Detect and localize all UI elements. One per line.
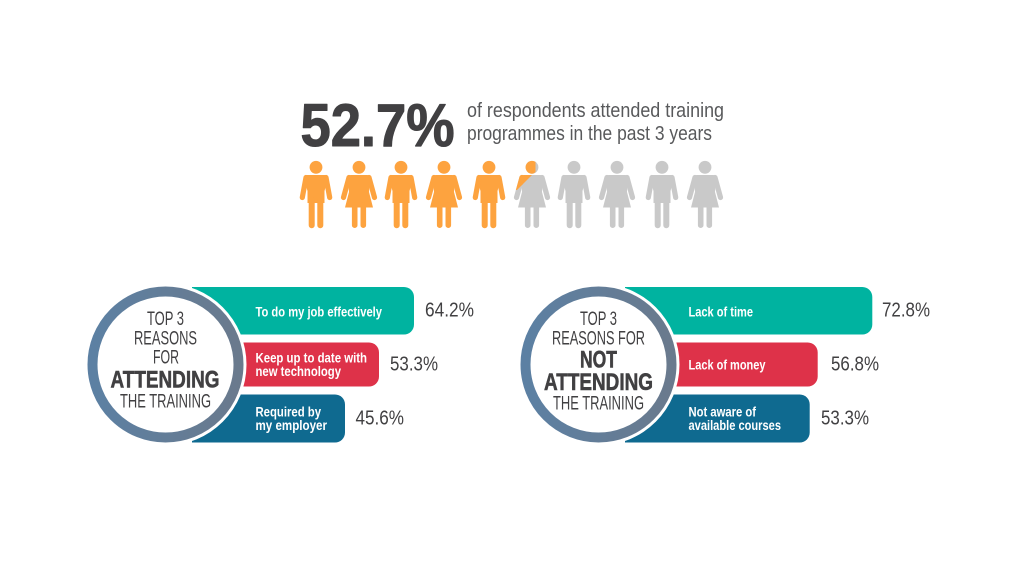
icon: person 5 filled [475, 161, 503, 225]
panel: reasons for not attending [518, 284, 930, 446]
bar: keep up to date [192, 342, 379, 386]
icon: person 2 filled [344, 161, 374, 225]
bar labels [256, 303, 382, 433]
badge: top 3 reasons for attending: THE TRAINING [120, 391, 211, 412]
bar: lack of money [625, 342, 818, 386]
bar: not aware of available courses [625, 394, 810, 442]
badge: top 3 reasons for not attending [518, 284, 680, 446]
bar labels: my employer [256, 417, 327, 433]
icon: person 3 filled [387, 161, 415, 225]
icon: person 1 filled [302, 161, 330, 225]
badge: top 3 reasons for attending: FOR [153, 347, 179, 368]
badge: top 3 reasons for not attending: THE TRAINING [553, 393, 644, 414]
bar labels: Keep up to date with [256, 350, 367, 366]
bar labels: Required by [256, 404, 321, 420]
bar labels: Lack of money [688, 356, 766, 372]
badge: top 3 reasons for attending [84, 284, 246, 446]
icon: person 10 empty [690, 161, 720, 225]
headline: 52.7%: 52.7% [300, 92, 454, 159]
bar labels: new technology [256, 363, 341, 379]
icon: person 9 empty [648, 161, 676, 225]
badge: top 3 reasons for not attending: REASONS FOR [552, 328, 645, 349]
icon: person 7 empty [560, 161, 588, 225]
values [821, 300, 930, 430]
values: 64.2% [425, 300, 474, 322]
values [356, 300, 474, 430]
badge: top 3 reasons for not attending: ATTENDING [544, 369, 653, 396]
panel: reasons for attending [84, 284, 474, 446]
bar: to do my job effectively [192, 287, 414, 334]
bar labels: To do my job effectively [256, 303, 382, 319]
values: 72.8% [882, 300, 930, 322]
headline description: programmes in the past 3 years [467, 122, 712, 145]
bar labels [688, 303, 781, 433]
values: 56.8% [831, 354, 879, 376]
pictogram: ten people, 52.7% filled [302, 161, 720, 225]
values: 45.6% [356, 408, 404, 430]
badge: top 3 reasons for attending: TOP 3 [147, 309, 184, 330]
icon: person 8 empty [602, 161, 632, 225]
values: 53.3% [390, 354, 438, 376]
headline description: of respondents attended training [467, 99, 724, 122]
headline description [467, 99, 724, 145]
icon: person 4 filled [428, 161, 460, 225]
badge: top 3 reasons for not attending: NOT [580, 346, 617, 373]
icon: person 6 partially filled [516, 161, 548, 225]
values: 53.3% [821, 408, 869, 430]
bar labels: Lack of time [688, 303, 753, 319]
badge: top 3 reasons for attending: REASONS [134, 328, 197, 349]
bar: lack of time [625, 287, 872, 334]
bar labels: Not aware of [688, 404, 756, 420]
badge: top 3 reasons for not attending: TOP 3 [580, 309, 617, 330]
badge: top 3 reasons for attending: ATTENDING [110, 367, 220, 394]
bar labels: available courses [688, 417, 781, 433]
bar: required by my employer [192, 394, 345, 442]
